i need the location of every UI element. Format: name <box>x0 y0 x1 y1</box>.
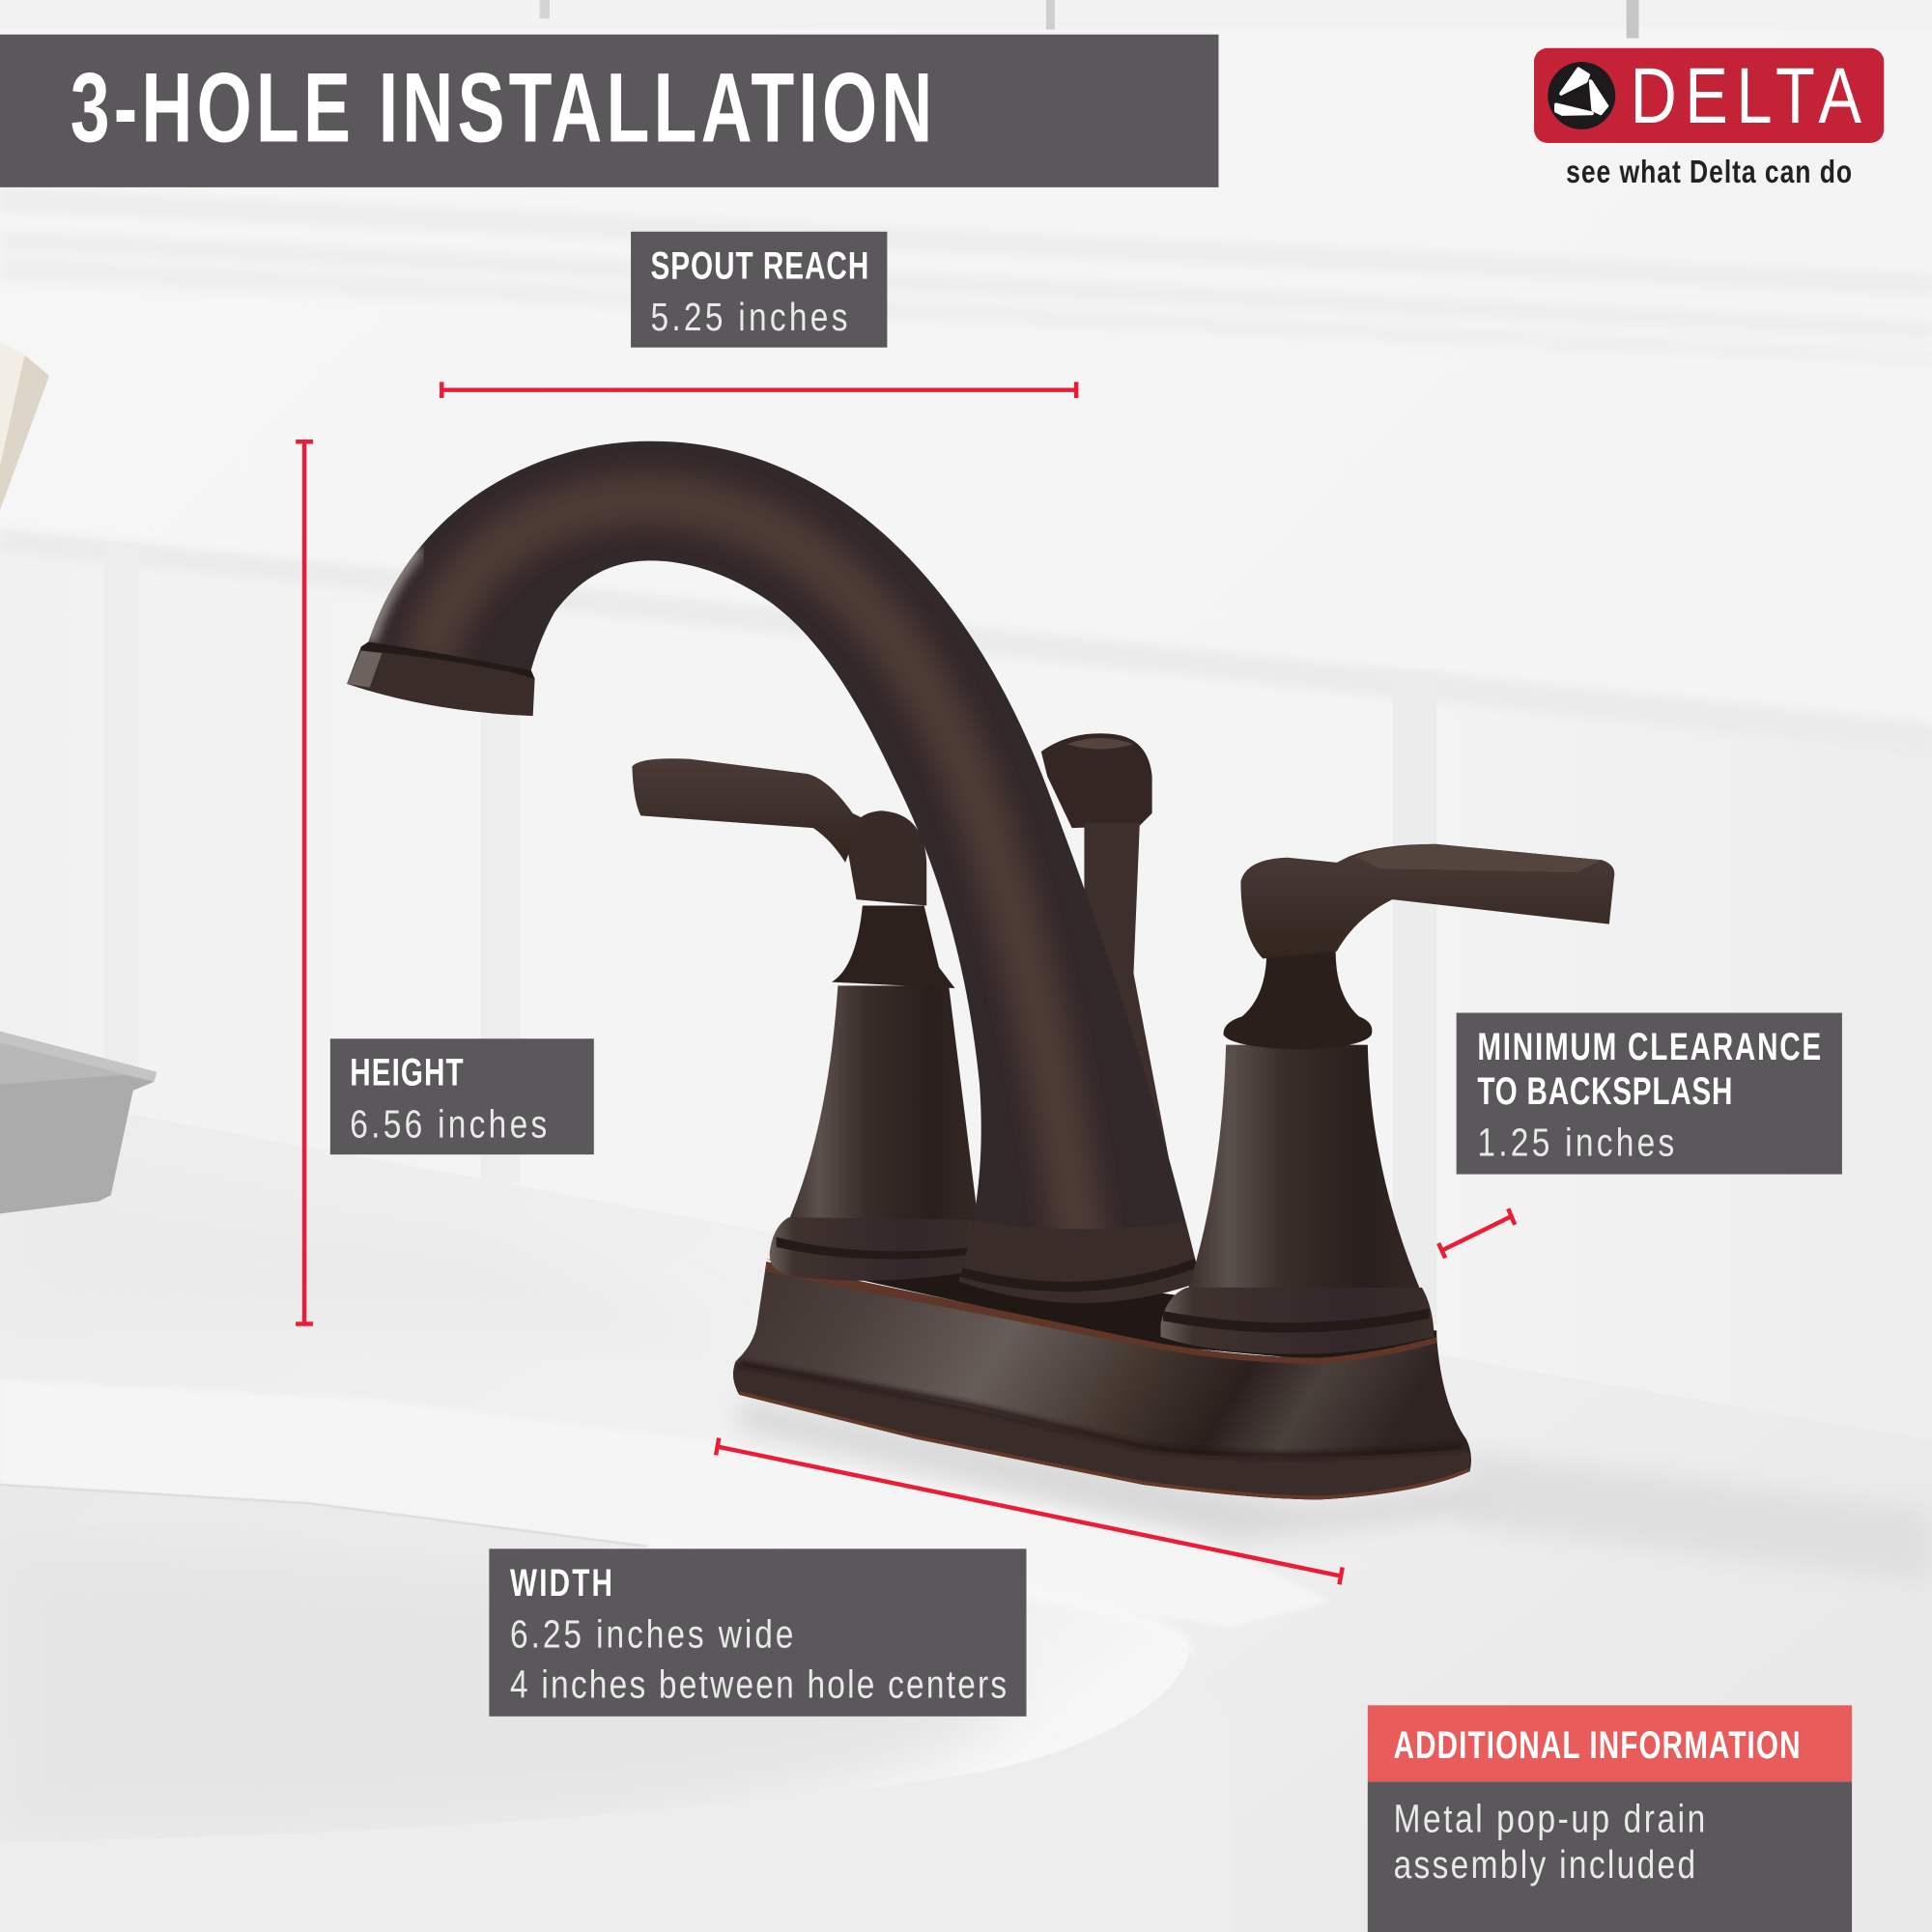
callout: height: HEIGHT <box>350 1052 464 1094</box>
Delta logo <box>1534 48 1884 190</box>
toothbrush <box>0 355 49 510</box>
callout: width: WIDTH <box>510 1562 612 1605</box>
right handle <box>1186 1045 1422 1293</box>
faucet base plate <box>733 1262 1471 1499</box>
panel: additional information: ADDITIONAL INFORMATION <box>1394 1724 1801 1767</box>
title bar <box>0 35 1218 187</box>
panel: additional information <box>1368 1705 1852 1932</box>
callout: width <box>489 1548 1026 1717</box>
rear post <box>1041 733 1152 828</box>
callout: spout reach: 5.25 inches <box>650 295 847 339</box>
callout: minimum clearance to backsplash <box>1457 1012 1842 1175</box>
panel: additional information: Metal pop-up drain <box>1394 1797 1705 1840</box>
callout: spout reach <box>631 232 887 348</box>
left handle <box>783 985 980 1233</box>
dimension line: spout reach <box>441 382 1077 398</box>
callout: minimum clearance to backsplash: TO BACKSPLASH <box>1477 1070 1732 1113</box>
callout: minimum clearance to backsplash: MINIMUM CLEARANCE <box>1477 1026 1821 1068</box>
spout nozzle <box>347 642 535 716</box>
faucet product photo <box>345 419 1614 1540</box>
callout: spout reach: SPOUT REACH <box>650 244 868 287</box>
panel: additional information: assembly included <box>1394 1842 1695 1887</box>
dimension line: backsplash clearance <box>1438 1208 1515 1258</box>
callout: width: 4 inches between hole centers <box>510 1662 1007 1706</box>
dimension line: height <box>296 441 313 1324</box>
icon: Delta triangle emblem <box>1548 62 1615 129</box>
Delta logo: DELTA <box>1631 51 1861 140</box>
tray <box>0 1032 156 1213</box>
callout: minimum clearance to backsplash: 1.25 inches <box>1477 1120 1674 1164</box>
callout: height <box>330 1038 594 1154</box>
spout <box>369 440 1196 1303</box>
Delta logo: see what Delta can do <box>1566 155 1852 190</box>
callout: height: 6.56 inches <box>350 1101 547 1146</box>
dimension line: width <box>716 1438 1343 1584</box>
callout: width: 6.25 inches wide <box>510 1611 793 1656</box>
title bar: 3-HOLE INSTALLATION <box>71 53 932 162</box>
